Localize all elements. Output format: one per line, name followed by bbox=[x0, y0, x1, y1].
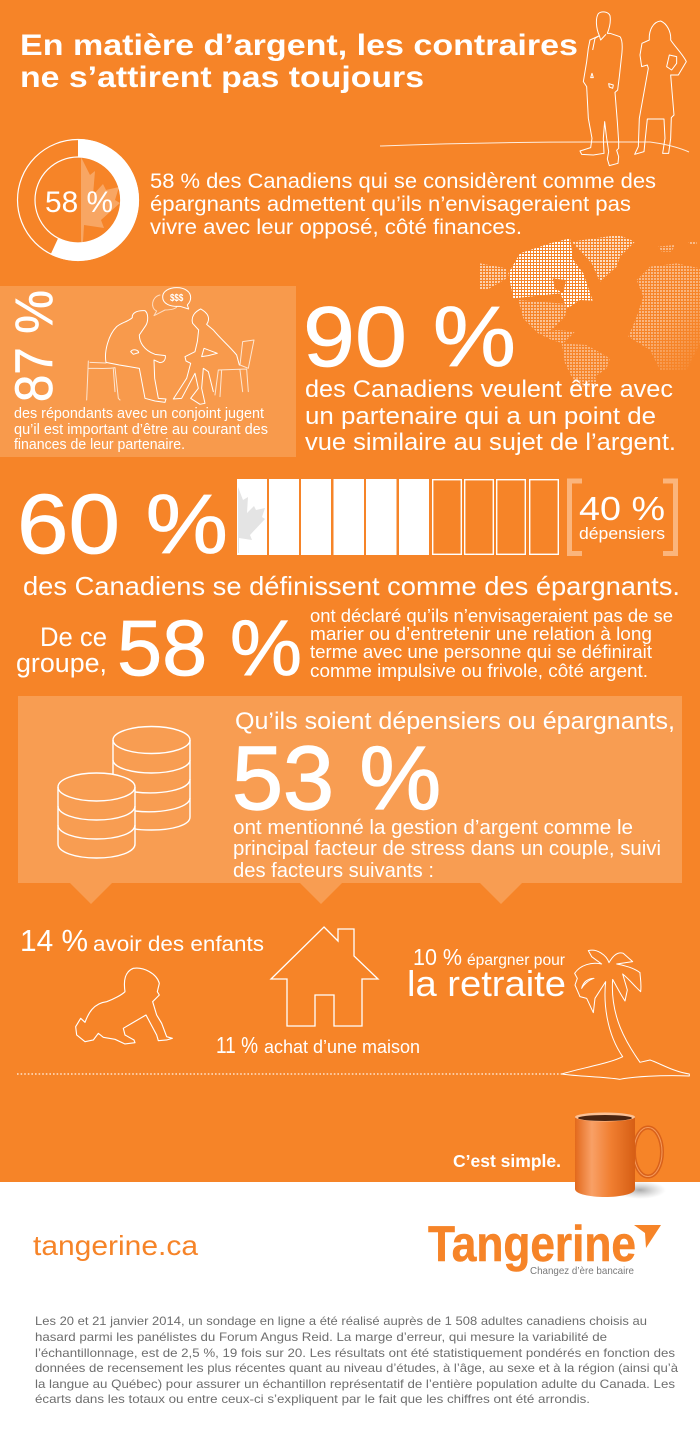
title: En matière d’argent, les contraires bbox=[20, 29, 578, 62]
text block: 90 % caption: un partenaire qui a un point de bbox=[305, 403, 656, 430]
text block: survey methodology note: hasard parmi les panélistes du Forum Angus Reid. La marge d’erreur, qui mesure la variabilité de bbox=[35, 1330, 607, 1344]
text block: 58 % of savers bbox=[150, 169, 656, 239]
panel: 53 % stress factor bbox=[18, 696, 682, 904]
text block: 90 % caption bbox=[305, 376, 676, 456]
bracket callout: 40 % spenders: 40 % bbox=[579, 490, 665, 527]
icon: crawling baby bbox=[76, 968, 172, 1044]
text block: 90 % caption: vue similaire au sujet de l’argent. bbox=[305, 429, 676, 456]
factor: 11 % buying a home: achat d’une maison bbox=[264, 1037, 420, 1057]
factor: 14 % having children: 14 % bbox=[20, 923, 88, 958]
world map of dots bbox=[480, 235, 700, 387]
text block: 90 % caption: des Canadiens veulent être avec bbox=[305, 376, 673, 403]
factor: 10 % saving for retirement: 10 % bbox=[413, 944, 462, 970]
text block: survey methodology note: la langue au Québec) pour assurer un échantillon représentatif de l’entière population adulte du Canada. Les bbox=[35, 1377, 675, 1391]
icon: half maple leaf bbox=[238, 487, 265, 553]
donut chart: 58 % bbox=[18, 139, 139, 261]
text block: 58 % of savers: épargnants admettent qu’ils n’envisageraient pas bbox=[150, 192, 631, 216]
illustration: two people talking about money bbox=[87, 288, 254, 404]
factor: 11 % buying a home bbox=[216, 927, 420, 1058]
panel: 87 % of respondents bbox=[0, 286, 296, 457]
rotated figure: 87 %: 87 % bbox=[5, 290, 64, 402]
text block: 58 % caption: marier ou d’entretenir une relation à long bbox=[310, 623, 652, 644]
icon: palm tree on island bbox=[562, 950, 689, 1079]
website link: tangerine.ca bbox=[33, 1230, 198, 1261]
panel text: principal facteur de stress dans un couple, suivi bbox=[233, 837, 661, 860]
text block: 60 % caption: des Canadiens se définissent comme des épargnants. bbox=[23, 571, 680, 601]
donut chart: 58 %: 58 % bbox=[45, 186, 113, 219]
title bbox=[20, 29, 578, 94]
factor: 11 % buying a home: 11 % bbox=[216, 1032, 258, 1058]
text block: survey methodology note bbox=[35, 1314, 678, 1406]
panel text: des facteurs suivants : bbox=[233, 859, 434, 882]
text block: 87 % caption bbox=[14, 406, 268, 453]
icon: orange coffee mug bbox=[575, 1112, 666, 1199]
icon: speech bubbles: $$$ bbox=[170, 293, 184, 304]
slogan: C’est simple. bbox=[453, 1151, 561, 1171]
title: ne s’attirent pas toujours bbox=[20, 61, 424, 94]
logo arrow bbox=[634, 1225, 661, 1248]
factor: 14 % having children: avoir des enfants bbox=[93, 933, 264, 956]
panel text: Qu’ils soient dépensiers ou épargnants, bbox=[235, 708, 675, 735]
big figure: 90 %: 90 % bbox=[303, 290, 516, 385]
bracket callout: 40 % spenders: dépensiers bbox=[579, 525, 665, 543]
factor: 14 % having children bbox=[20, 923, 264, 1044]
big figure: 58 %: 58 % bbox=[117, 603, 302, 692]
icon: speech bubbles bbox=[153, 288, 191, 316]
logo tagline: Changez d’ère bancaire bbox=[530, 1265, 634, 1277]
text block: 58 % caption: comme impulsive ou frivole, côté argent. bbox=[310, 660, 648, 681]
text block: 58 % caption bbox=[310, 605, 673, 681]
panel text: ont mentionné la gestion d’argent comme le bbox=[233, 816, 633, 839]
text block: survey methodology note: données de recensement les plus récentes quant au niveau d’études, à l’âge, au sexe et à la région (ainsi qu’à bbox=[35, 1361, 678, 1375]
white footer background bbox=[0, 1182, 700, 1450]
factor: 10 % saving for retirement: épargner pour bbox=[467, 952, 565, 969]
text block: de ce groupe bbox=[16, 622, 107, 678]
text block: survey methodology note: l’échantillonnage, est de 2,5 %, 19 fois sur 20. Les résultats ont été statistiquement pondérés en fonction des bbox=[35, 1346, 675, 1360]
text block: 58 % caption: ont déclaré qu’ils n’envisageraient pas de se bbox=[310, 605, 673, 626]
bracket callout: 40 % spenders bbox=[570, 481, 676, 554]
text block: 87 % caption: des répondants avec un conjoint jugent bbox=[14, 406, 264, 422]
text block: 87 % caption: qu’il est important d’être au courant des bbox=[14, 422, 268, 438]
text block: 87 % caption: finances de leur partenaire. bbox=[14, 437, 185, 453]
text block: survey methodology note: Les 20 et 21 janvier 2014, un sondage en ligne a été réalisé auprès de 1 508 adultes canadiens choisis au bbox=[35, 1314, 647, 1328]
text block: de ce groupe: De ce bbox=[40, 622, 107, 652]
factor: 10 % saving for retirement: la retraite bbox=[407, 963, 566, 1004]
text block: 58 % of savers: vivre avec leur opposé, côté finances. bbox=[150, 215, 522, 239]
factor: 10 % saving for retirement bbox=[407, 944, 689, 1079]
Tangerine logo: Tangerine bbox=[428, 1216, 636, 1272]
big figure: 60 %: 60 % bbox=[17, 477, 228, 571]
text block: de ce groupe: groupe, bbox=[16, 648, 107, 678]
panel text bbox=[232, 708, 675, 882]
bar chart: 10 bars, 6 filled bbox=[237, 479, 558, 555]
panel text: 53 % bbox=[232, 729, 441, 829]
text block: survey methodology note: écarts dans les totaux ou entre ceux-ci s’expliquent par le fait que les chiffres ont été arrondis. bbox=[35, 1392, 590, 1406]
text block: 58 % of savers: 58 % des Canadiens qui se considèrent comme des bbox=[150, 169, 656, 193]
icon: stacks of coins bbox=[58, 726, 190, 858]
icon: house bbox=[271, 927, 378, 1026]
text block: 58 % caption: terme avec une personne qui se définirait bbox=[310, 641, 652, 662]
illustration: couple silhouette bbox=[380, 12, 689, 166]
